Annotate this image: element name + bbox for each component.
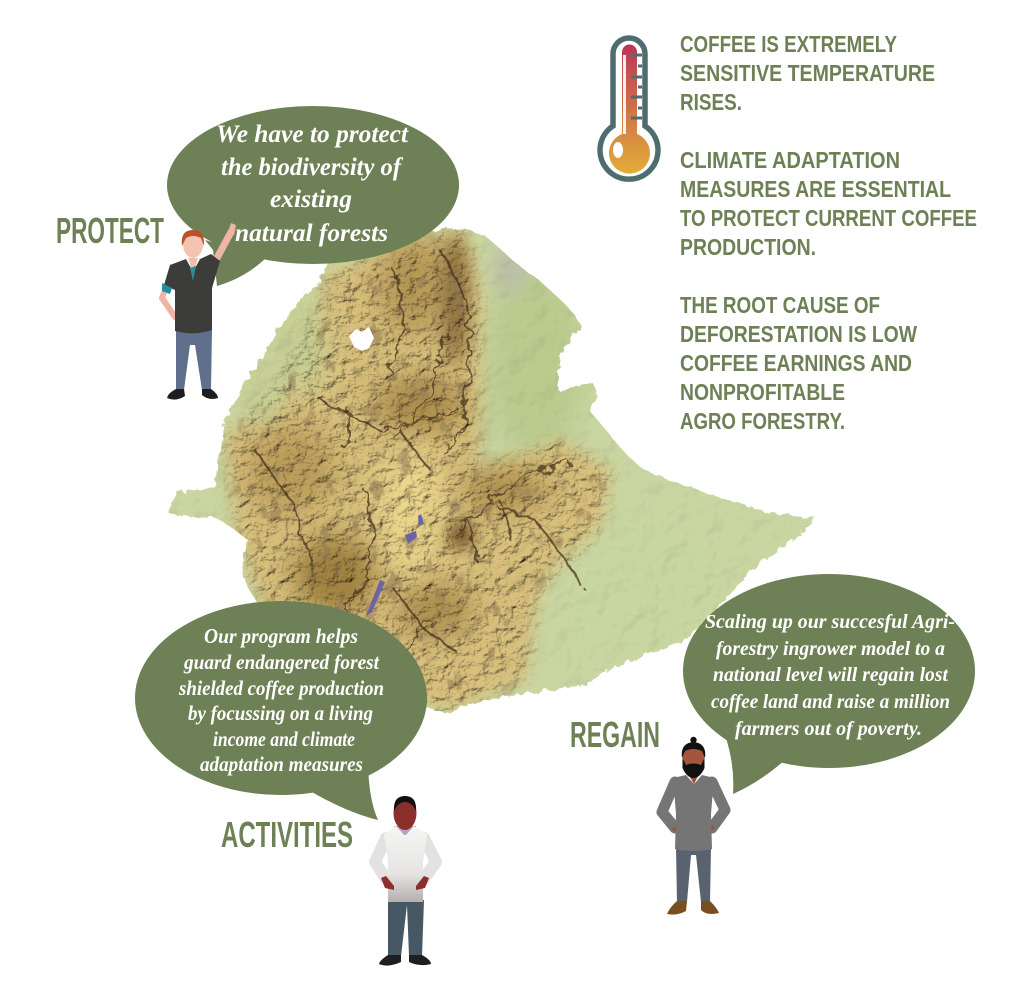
activities quote: [178, 624, 384, 776]
text block: root cause of deforestation: AGRO FORESTRY.: [680, 408, 845, 434]
text block: climate adaptation: CLIMATE ADAPTATION: [680, 147, 900, 173]
text block: climate adaptation: [680, 147, 977, 260]
regain quote: national level will regain lost: [713, 664, 949, 686]
text block: root cause of deforestation: DEFORESTATION IS LOW: [680, 321, 917, 347]
activities quote: guard endangered forest: [183, 650, 380, 674]
text block: root cause of deforestation: THE ROOT CAUSE OF: [680, 292, 880, 318]
regain quote: forestry ingrower model to a: [716, 638, 945, 660]
figure: man in white sweater (activities): [375, 796, 436, 966]
text block: climate adaptation: MEASURES ARE ESSENTIAL: [680, 176, 951, 202]
speech bubble: regain: [683, 574, 975, 794]
regain quote: Scaling up our succesful Agri-: [705, 611, 955, 633]
speech bubble: activities: [135, 601, 427, 820]
text block: root cause of deforestation: COFFEE EARNINGS AND: [680, 350, 912, 376]
activities quote: Our program helps: [204, 624, 358, 648]
protect quote: We have to protect: [216, 121, 409, 148]
protect quote: natural forests: [235, 220, 388, 247]
label: activities: ACTIVITIES: [221, 814, 353, 855]
activities quote: adaptation measures: [200, 752, 363, 776]
figure: bearded man with top knot (regain): [662, 737, 725, 915]
text block: root cause of deforestation: NONPROFITABLE: [680, 379, 845, 405]
label: regain: REGAIN: [570, 714, 660, 755]
protect quote: existing: [270, 186, 352, 213]
regain quote: farmers out of poverty.: [735, 718, 922, 740]
lake gap in the map: [349, 327, 374, 351]
protect quote: [216, 121, 409, 247]
text block: climate adaptation: PRODUCTION.: [680, 234, 816, 260]
text block: coffee sensitivity: [680, 31, 935, 115]
label: protect: PROTECT: [56, 210, 164, 251]
regain quote: coffee land and raise a million: [711, 691, 950, 713]
map of Ethiopia with shaded relief: [168, 226, 815, 714]
text block: coffee sensitivity: SENSITIVE TEMPERATURE: [680, 60, 935, 86]
text block: coffee sensitivity: COFFEE IS EXTREMELY: [680, 31, 897, 57]
protect quote: the biodiversity of: [221, 154, 404, 181]
activities quote: by focussing on a living: [188, 701, 373, 725]
text block: root cause of deforestation: [680, 292, 917, 434]
icon: thermometer: [600, 38, 658, 179]
speech bubble: protect: [167, 106, 459, 286]
activities quote: shielded coffee production: [178, 676, 384, 700]
text block: coffee sensitivity: RISES.: [680, 89, 742, 115]
figure: man pointing (protect): [162, 223, 236, 400]
regain quote: [705, 611, 955, 740]
activities quote: income and climate: [213, 727, 355, 751]
